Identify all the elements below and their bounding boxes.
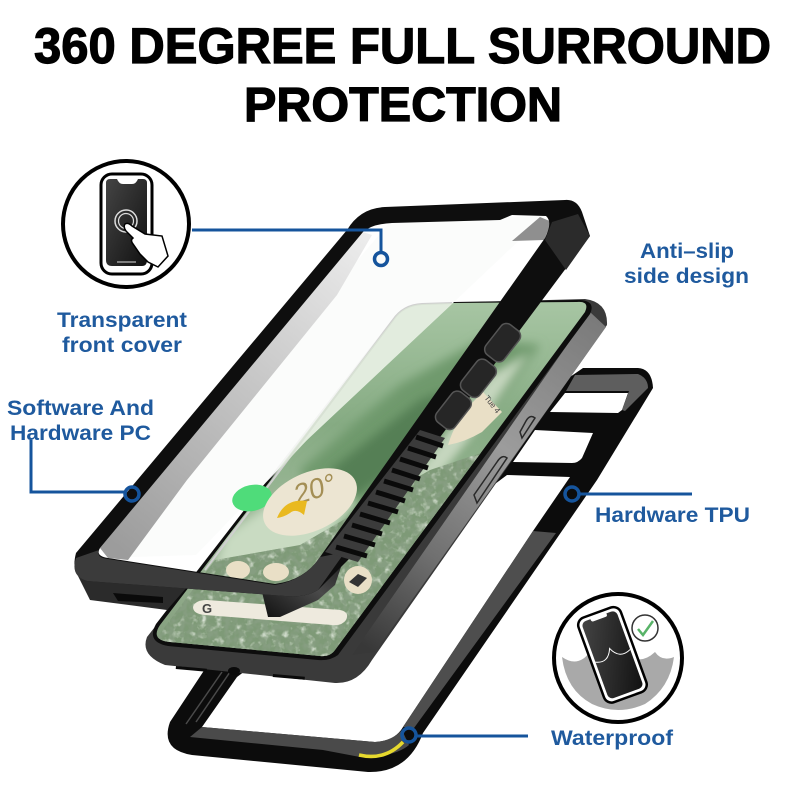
label: waterproof: Waterproof xyxy=(551,727,674,750)
icon: hand xyxy=(124,223,168,267)
callout: software and hardware PC line xyxy=(31,440,139,501)
google bar xyxy=(193,600,347,625)
face xyxy=(74,200,590,596)
icon: waterproof phone xyxy=(554,594,682,722)
label: transparent front cover: front cover xyxy=(62,334,182,357)
date text: Tue 4 xyxy=(482,394,502,416)
label: transparent front cover xyxy=(57,309,187,357)
underside xyxy=(78,576,188,610)
callout: transparent front cover line xyxy=(192,230,388,266)
side wall xyxy=(545,214,590,270)
back frame top right grey xyxy=(566,374,648,411)
back frame grey bottom ledge xyxy=(190,727,409,757)
check badge xyxy=(632,615,658,641)
grip strip xyxy=(325,430,445,562)
front glass cover xyxy=(100,216,552,570)
weather widget: 20° xyxy=(292,466,337,511)
glare on glass xyxy=(105,216,545,558)
corner drop xyxy=(262,555,345,617)
clock widget patch xyxy=(448,392,502,445)
fingerprint xyxy=(230,481,274,515)
front cover frame xyxy=(74,200,590,617)
callout: waterproof line xyxy=(402,728,528,742)
label: software and hardware PC: Software And xyxy=(7,397,154,420)
bottom frame grey face xyxy=(74,550,345,596)
title xyxy=(34,18,771,132)
middle phone: G xyxy=(202,601,212,616)
phone xyxy=(576,605,649,705)
side buttons xyxy=(433,321,523,432)
yellow seal xyxy=(359,742,403,756)
wallpaper xyxy=(156,302,586,656)
icon: touch phone xyxy=(63,161,189,287)
title: PROTECTION xyxy=(244,79,562,132)
phone screen xyxy=(153,300,592,660)
bottom ports xyxy=(176,666,305,680)
callout: hardware TPU line xyxy=(565,487,692,501)
back case frame xyxy=(168,368,653,772)
camera app icon xyxy=(344,566,372,594)
home icons xyxy=(226,561,289,581)
grey tinted band xyxy=(100,232,372,560)
weather widget xyxy=(252,455,368,549)
water xyxy=(562,650,674,710)
screen edge seen through glass xyxy=(205,303,452,570)
silver side band xyxy=(352,312,606,655)
power and volume keys xyxy=(474,417,535,503)
back frame right side grey xyxy=(403,531,556,728)
glass corner tint xyxy=(512,217,552,241)
middle phone xyxy=(140,295,607,683)
back frame left arm ridges xyxy=(186,672,230,724)
label: anti-slip side design: Anti–slip xyxy=(640,240,734,263)
title: 360 DEGREE FULL SURROUND xyxy=(34,18,771,74)
label: transparent front cover: Transparent xyxy=(57,309,187,332)
phone body xyxy=(145,299,607,683)
label: software and hardware PC: Hardware PC xyxy=(10,422,151,445)
label: software and hardware PC xyxy=(7,397,154,445)
label: anti-slip side design xyxy=(624,240,749,288)
label: hardware TPU: Hardware TPU xyxy=(595,504,750,527)
label: anti-slip side design: side design xyxy=(624,265,749,288)
camera glyph xyxy=(349,574,367,587)
